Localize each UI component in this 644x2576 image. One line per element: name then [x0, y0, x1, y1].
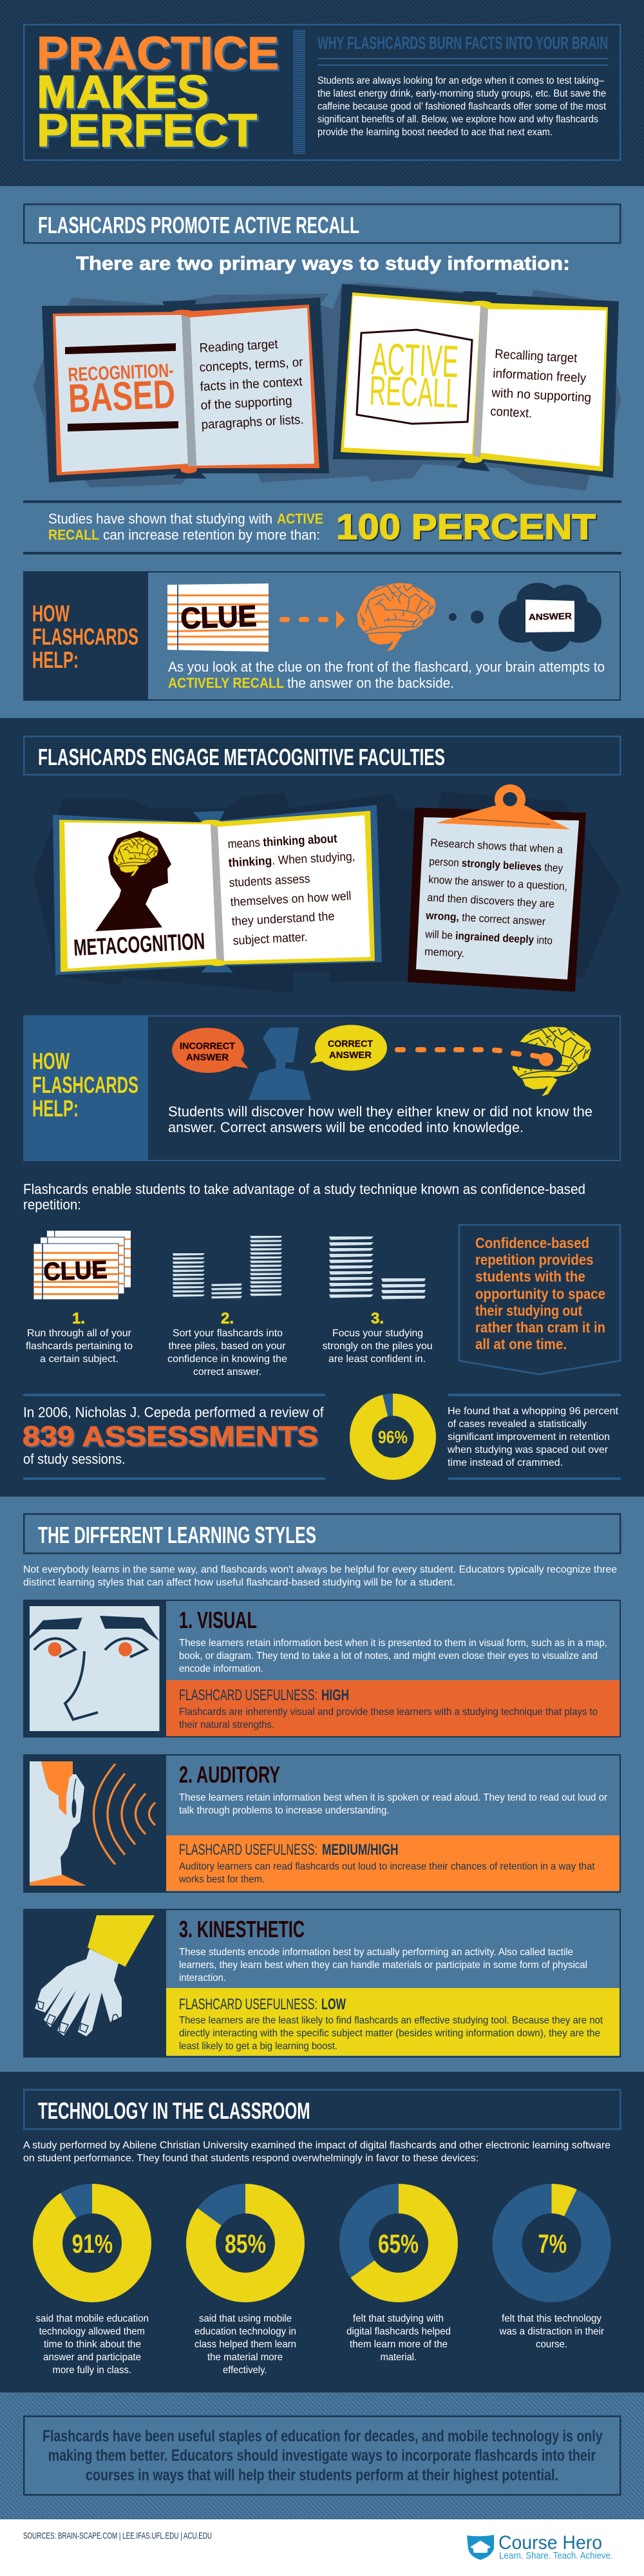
icon: orange brain: [357, 583, 436, 651]
panel: usefulness low: [166, 1988, 620, 2056]
label: active recall: ACTIVE: [370, 334, 459, 387]
step 1: 1.: [72, 1310, 85, 1327]
panel: auditory learners: [23, 1754, 620, 1893]
panel: usefulness medium/high: Auditory learners can read flashcards out loud to increase their chances of retention in a way that: [179, 1861, 595, 1872]
icon: person silhouette: [249, 1027, 311, 1100]
text: metacognition explanation: [168, 1104, 592, 1135]
title: PRACTICE: [37, 28, 279, 79]
heading: how flashcards help: HELP:: [32, 647, 79, 673]
text: confidence-based repetition intro: repetition:: [23, 1197, 81, 1213]
chart: 85 percent donut: 85%: [225, 2229, 266, 2259]
callout: 839 assessments: 839 ASSESSMENTS: [23, 1421, 318, 1452]
icon: clue card: [167, 583, 269, 652]
panel: usefulness high: HIGH: [321, 1687, 349, 1704]
text: metacognition explanation: answer. Correct answers will be encoded into knowledge.: [168, 1119, 524, 1135]
caption: felt that this technology: [502, 2313, 601, 2324]
text: kinesthetic description: [179, 1947, 587, 1984]
text: research finding: will be ingrained deeply into: [424, 928, 553, 947]
label: recognition-based: BASED: [68, 372, 176, 421]
text: study finding: significant improvement in retention: [448, 1432, 610, 1443]
icon: clip: [436, 784, 570, 829]
icon: head silhouette with brain: [95, 831, 171, 931]
caption: answer and participate: [43, 2352, 141, 2363]
intro paragraph: provide the learning boost needed to ace that next exam.: [317, 127, 553, 138]
text: active recall description: with no supporting: [491, 386, 592, 405]
text: study finding: time instead of crammed.: [448, 1457, 563, 1468]
section background: footer: [0, 2519, 644, 2576]
step 1: Run through all of your: [27, 1328, 132, 1339]
step 3: Focus your studying: [332, 1328, 423, 1339]
icon: yellow brain encoding answer: [509, 1027, 591, 1096]
panel: usefulness low: FLASHCARD USEFULNESS:: [179, 1996, 317, 2013]
text: study finding: of cases revealed a statistically: [448, 1419, 587, 1430]
text: technology intro: [23, 2140, 611, 2164]
section background: technology: [0, 2072, 644, 2392]
text: study finding: He found that a whopping 96 percent: [448, 1406, 619, 1417]
panel: usefulness high: their natural strengths.: [179, 1719, 274, 1730]
icon: thought cloud with answer: [498, 583, 601, 652]
text: metacognition definition: [227, 832, 355, 948]
panel: usefulness medium/high: MEDIUM/HIGH: [322, 1841, 398, 1859]
panel: usefulness medium/high: [166, 1835, 620, 1891]
icon: two focused piles: [329, 1236, 426, 1302]
text: metacognition definition: thinking. When studying,: [228, 850, 355, 870]
intro paragraph: Students are always looking for an edge when it comes to test taking–: [317, 75, 604, 86]
text: recall explanation: As you look at the clue on the front of the flashcard, your brain attempts to: [168, 659, 605, 675]
icon: thought dots: [449, 611, 484, 623]
panel: active recall heading: [24, 204, 620, 243]
caption: the material more: [207, 2352, 283, 2363]
text: active recall description: [490, 347, 592, 421]
callout: 100 percent: 100 PERCENT: [336, 506, 596, 547]
text: research finding: person strongly believes they: [429, 855, 564, 875]
label: active recall: [369, 334, 459, 417]
panel: title header: [24, 24, 620, 160]
heading: how flashcards help: FLASHCARDS: [32, 623, 138, 650]
caption: more fully in class.: [53, 2365, 131, 2376]
illustration: active recall book: [333, 284, 619, 478]
caption: was a distraction in their: [499, 2326, 605, 2337]
label: active recall: RECALL: [369, 367, 459, 417]
panel: usefulness medium/high: works best for them.: [178, 1874, 265, 1885]
text: research finding: memory.: [424, 945, 465, 960]
panel: technology heading: TECHNOLOGY IN THE CLASSROOM: [38, 2098, 310, 2124]
step 3: 3.: [371, 1310, 384, 1327]
caption: digital flashcards helped: [346, 2326, 451, 2337]
text: active recall description: Recalling target: [495, 347, 578, 366]
intro paragraph: [317, 75, 607, 138]
callout: 839 assessments: of study sessions.: [23, 1451, 125, 1467]
chart: 85 percent donut: [194, 2199, 296, 2376]
callout: 839 assessments: [23, 1394, 325, 1480]
title: [37, 28, 279, 156]
heading: how flashcards help: HELP:: [32, 1095, 79, 1122]
illustration: clipboard: [408, 784, 586, 992]
text: learning styles intro: distinct learning styles that can affect how useful flashcard-based studying will be for a student.: [23, 1577, 455, 1588]
label: recognition-based: RECOGNITION-: [68, 360, 174, 386]
text: learning styles intro: [23, 1564, 617, 1588]
subheading: There are two primary ways to study information:: [76, 253, 570, 274]
text: recognition description: of the supporting: [200, 394, 292, 413]
intro paragraph: significant benefits of all. Below, we explore how and why flashcards: [317, 114, 598, 125]
text: recognition description: Reading target: [199, 337, 279, 355]
icon: incorrect answer bubble: [172, 1028, 249, 1073]
panel: usefulness high: FLASHCARD USEFULNESS:: [179, 1687, 317, 1704]
text: research finding: know the answer to a question,: [428, 873, 567, 893]
callout: confidence-based repetition: rather than cram it in: [475, 1319, 605, 1336]
text: technology intro: on student performance. They found that students respond overwhelmingly in favor to these devices:: [23, 2153, 478, 2164]
text: confidence-based repetition intro: [23, 1181, 585, 1213]
heading: how flashcards help: [32, 1048, 138, 1122]
step 1: flashcards pertaining to: [26, 1341, 133, 1352]
caption: time to think about the: [44, 2339, 141, 2350]
text: recall explanation: ACTIVELY RECALL: [168, 675, 284, 691]
icon: incorrect answer bubble: INCORRECT: [180, 1041, 235, 1052]
caption: [346, 2313, 451, 2363]
panel: metacognitive heading: [24, 737, 620, 775]
panel: usefulness low: LOW: [321, 1996, 346, 2013]
text: auditory description: [179, 1792, 608, 1816]
section background: intro band: [0, 0, 644, 186]
text: confidence-based repetition intro: Flashcards enable students to take advantage of a study technique known as confidence-based: [23, 1181, 585, 1197]
callout: 100 percent: can increase retention by more than:: [103, 527, 320, 543]
callout: 100 percent: Studies have shown that studying with: [48, 511, 272, 527]
panel: kinesthetic learners: [23, 1909, 620, 2058]
chart: 96 percent donut: 96%: [378, 1427, 408, 1447]
text: visual description: [179, 1638, 607, 1674]
caption: them learn more of the: [350, 2339, 448, 2350]
text: kinesthetic description: interaction.: [179, 1973, 226, 1984]
panel: usefulness low: least likely to get a big learning boost.: [179, 2041, 337, 2052]
text: visual description: encode information.: [179, 1663, 263, 1674]
step 2: [167, 1310, 287, 1378]
text: metacognition definition: means thinking about: [227, 832, 338, 851]
logo: Course Hero: [467, 2532, 613, 2561]
icon: incorrect answer bubble: ANSWER: [186, 1052, 229, 1063]
panel: metacognitive heading: FLASHCARDS ENGAGE METACOGNITIVE FACULTIES: [38, 744, 445, 770]
step 3: strongly on the piles you: [323, 1341, 433, 1352]
step 2: correct answer.: [193, 1367, 261, 1378]
callout: 100 percent: RECALL: [48, 527, 99, 543]
heading: kinesthetic: 3. KINESTHETIC: [179, 1916, 305, 1942]
text: recognition description: [199, 337, 304, 432]
arrow: dashes into brain: [395, 1047, 553, 1066]
caption: [36, 2313, 149, 2376]
callout: confidence-based repetition: repetition provides: [475, 1251, 594, 1268]
logo: Course Hero: Learn. Share. Teach. Achieve.: [499, 2550, 613, 2561]
panel: active recall heading: FLASHCARDS PROMOTE ACTIVE RECALL: [38, 212, 359, 238]
step 2: confidence in knowing the: [167, 1354, 287, 1365]
callout: confidence-based repetition: Confidence-based: [475, 1235, 589, 1251]
section background: conclusion band: [0, 2392, 644, 2519]
chart: 96 percent donut: [361, 1405, 425, 1469]
caption: effectively.: [223, 2365, 267, 2376]
step 2: Sort your flashcards into: [173, 1328, 283, 1339]
book shadow silhouette: [33, 283, 621, 491]
text: kinesthetic description: learners, they learn best when they can handle materials or participate in some form of physical: [179, 1960, 587, 1971]
text: research finding: and then discovers they are: [427, 891, 555, 910]
text: active recall description: context.: [490, 404, 533, 421]
heading: how flashcards help: [32, 600, 138, 673]
illustration: face: [30, 1606, 160, 1731]
arrow: dashed to brain: [279, 611, 345, 629]
section background: learning styles: [0, 1497, 644, 2072]
panel: usefulness high: Flashcards are inherently visual and provide these learners with a studying technique that plays to: [179, 1707, 598, 1718]
step 1: [26, 1310, 133, 1365]
callout: 100 percent: [23, 500, 621, 554]
text: recall explanation: the answer on the backside.: [287, 675, 454, 691]
title: MAKES: [37, 67, 209, 118]
heading: visual: 1. VISUAL: [179, 1607, 257, 1633]
text: metacognition definition: students assess: [229, 872, 310, 890]
intro paragraph: caffeine because good ol’ fashioned flashcards offer some of the most: [317, 101, 607, 112]
panel: usefulness low: These learners are the least likely to find flashcards an effective studying tool. Because they are not: [179, 2015, 603, 2026]
icon: clue card: CLUE: [180, 599, 257, 635]
icon: correct answer bubble: CORRECT: [328, 1039, 373, 1050]
caption: material.: [381, 2352, 417, 2363]
text: auditory description: talk through problems to increase understanding.: [179, 1805, 389, 1816]
icon: stacked clue cards: CLUE: [43, 1256, 108, 1286]
callout: confidence-based repetition: students with the: [475, 1268, 585, 1285]
caption: course.: [536, 2339, 567, 2350]
caption: class helped them learn: [194, 2339, 296, 2350]
step 3: are least confident in.: [328, 1354, 426, 1365]
callout: confidence-based repetition: their studying out: [475, 1302, 582, 1319]
caption: felt that studying with: [353, 2313, 444, 2324]
step 2: 2.: [221, 1310, 234, 1327]
panel: how flashcards help (recall): [23, 571, 620, 701]
caption: [194, 2313, 296, 2376]
text: study finding: [447, 1394, 621, 1480]
illustration: recognition-based book: [42, 298, 329, 482]
text: research finding: Research shows that when a: [430, 837, 564, 856]
chart: 7 percent donut: 7%: [538, 2229, 567, 2259]
icon: shield: [467, 2535, 494, 2560]
callout: confidence-based repetition: all at one time.: [475, 1336, 567, 1352]
icon: thought cloud with answer: ANSWER: [529, 611, 572, 622]
section background: active recall: [0, 186, 644, 718]
callout: 839 assessments: In 2006, Nicholas J. Cepeda performed a review of: [23, 1404, 324, 1421]
caption: technology allowed them: [39, 2326, 145, 2337]
text: visual description: These learners retain information best when it is presented to them in visual form, such as in a map,: [179, 1638, 607, 1649]
panel: usefulness high: [166, 1680, 620, 1736]
footer sources: SOURCES: BRAIN-SCAPE.COM | LEE.IFAS.UFL.EDU | ACU.EDU: [23, 2530, 212, 2541]
caption: [499, 2313, 605, 2350]
panel: usefulness low: directly interacting with the specific subject matter (besides writing information down), they are the: [179, 2028, 600, 2039]
label: metacognition: METACOGNITION: [73, 927, 205, 961]
text: recognition description: paragraphs or lists.: [201, 413, 304, 432]
illustration: ear with sound waves: [30, 1761, 155, 1886]
caption: education technology in: [194, 2326, 296, 2337]
icon: correct answer bubble: ANSWER: [329, 1050, 372, 1061]
callout: confidence-based repetition: [459, 1225, 620, 1374]
icon: three piles of cards: [173, 1236, 282, 1300]
logo: Course Hero: Course Hero: [498, 2532, 602, 2553]
text: learning styles intro: Not everybody learns in the same way, and flashcards won't always be helpful for every student. Educators typically recognize three: [23, 1564, 617, 1575]
text: visual description: book, or diagram. They tend to take a lot of notes, and might even close their eyes to visualize and: [179, 1651, 598, 1662]
step 1: a certain subject.: [40, 1354, 118, 1365]
panel: visual learners: [23, 1600, 620, 1738]
text: auditory description: These learners retain information best when it is spoken or read aloud. They tend to read out loud or: [179, 1792, 608, 1803]
text: research finding: wrong, the correct answer: [425, 909, 546, 928]
text: recognition description: concepts, terms, or: [199, 355, 303, 375]
text: active recall description: information freely: [493, 366, 587, 386]
hatched divider: [293, 30, 305, 155]
metacognition shadow silhouette: [33, 791, 621, 993]
text: research finding: [424, 837, 567, 960]
text: metacognition definition: subject matter.: [232, 931, 308, 948]
icon: correct answer bubble: [310, 1025, 387, 1070]
intro paragraph: the latest energy drink, early-morning study groups, etc. But save the: [317, 88, 606, 99]
chart: 91 percent donut: [36, 2199, 149, 2376]
callout: confidence-based repetition: opportunity to space: [475, 1285, 605, 1302]
caption: said that mobile education: [36, 2313, 149, 2324]
text: technology intro: A study performed by Abilene Christian University examined the impact of digital flashcards and other electronic learning software: [23, 2140, 611, 2151]
panel: how flashcards help (metacognition): [23, 1015, 620, 1161]
callout: 100 percent: ACTIVE: [277, 511, 323, 527]
illustration: metacognition book: [53, 805, 382, 975]
title: PERFECT: [37, 106, 257, 156]
heading: how flashcards help: FLASHCARDS: [32, 1072, 138, 1098]
section background: metacognition: [0, 718, 644, 1497]
text: kinesthetic description: These students encode information best by actually performing an activity. Also called tactile: [179, 1947, 573, 1958]
icon: stacked clue cards: [33, 1231, 131, 1300]
text: recall explanation: [168, 659, 605, 691]
panel: technology heading: [24, 2090, 620, 2129]
panel: learning styles heading: THE DIFFERENT LEARNING STYLES: [38, 1522, 316, 1548]
chart: 65 percent donut: [346, 2199, 451, 2363]
chart: 65 percent donut: 65%: [378, 2229, 419, 2259]
step 2: three piles, based on your: [169, 1341, 286, 1352]
chart: 7 percent donut: [499, 2199, 605, 2350]
step 3: [323, 1310, 433, 1365]
chart: 91 percent donut: 91%: [72, 2229, 113, 2259]
text: metacognition definition: they understand the: [231, 910, 335, 929]
text: metacognition definition: themselves on how well: [230, 889, 352, 909]
panel: conclusion: [24, 2416, 620, 2495]
heading: how flashcards help: HOW: [32, 1048, 70, 1074]
text: recognition description: facts in the context: [200, 375, 303, 394]
panel: learning styles heading: [24, 1514, 620, 1553]
text: metacognition explanation: Students will discover how well they either knew or did not know the: [168, 1104, 592, 1119]
heading: auditory: 2. AUDITORY: [179, 1761, 280, 1788]
heading: how flashcards help: HOW: [32, 600, 70, 627]
caption: said that using mobile: [199, 2313, 292, 2324]
illustration: hand and sleeve: [35, 1915, 155, 2036]
label: recognition-based: [68, 360, 176, 421]
panel: usefulness medium/high: FLASHCARD USEFULNESS:: [179, 1841, 317, 1859]
text: study finding: when studying was spaced out over: [447, 1444, 609, 1455]
